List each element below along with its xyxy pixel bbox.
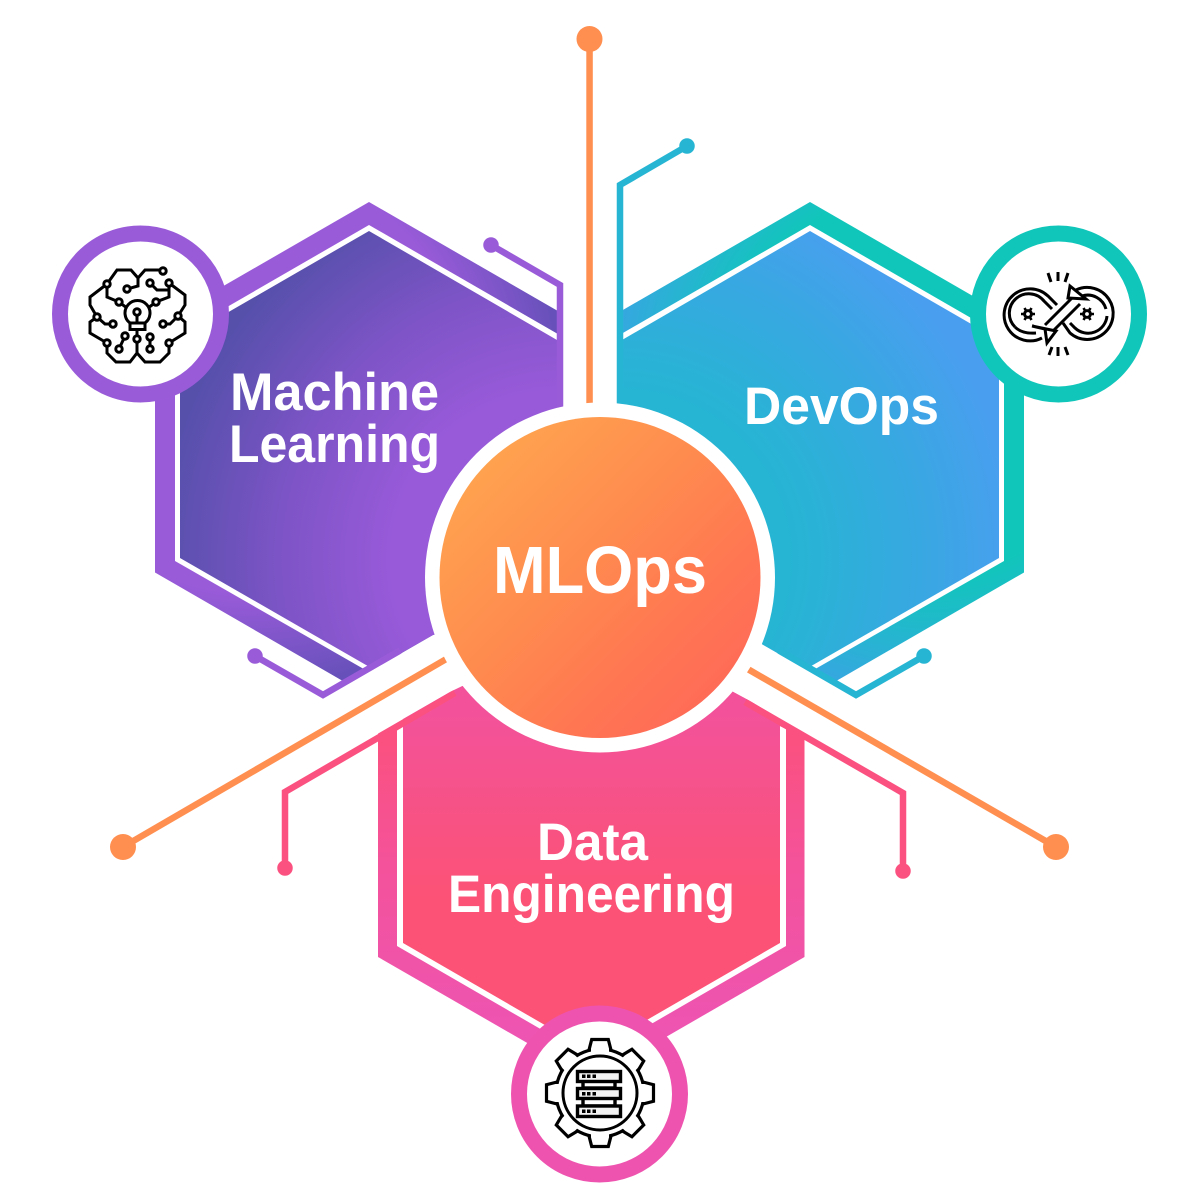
badge: DevOps xyxy=(978,234,1139,394)
hexagon inner white outline: teal xyxy=(622,225,1004,672)
label: Machine Learning: Learning xyxy=(229,415,440,474)
label: Machine Learning xyxy=(229,363,440,474)
icon: gear with server stack xyxy=(546,1040,654,1146)
panel: Machine Learning hexagon xyxy=(155,202,563,695)
hexagon inner white outline: pink xyxy=(397,640,786,1058)
icon: infinity loop with gears and arrows xyxy=(1004,272,1113,356)
panel: Data Engineering hexagon xyxy=(280,620,908,1080)
label: DevOps: DevOps xyxy=(744,377,939,436)
panel: DevOps hexagon xyxy=(617,142,1024,695)
hexagon fill: pink xyxy=(403,620,780,1052)
label: Data Engineering: Data xyxy=(537,813,648,872)
icon: brain circuit with light bulb xyxy=(90,268,185,362)
hexagon inner white outline: purple xyxy=(175,225,557,672)
label: Data Engineering: Engineering xyxy=(448,865,735,924)
badge: Data Engineering xyxy=(519,1014,680,1174)
badge: Machine Learning xyxy=(60,234,221,394)
connector: pink right xyxy=(745,702,908,876)
central circle: MLOps xyxy=(425,402,775,752)
connector: teal lower xyxy=(779,650,928,695)
hexagon fill: purple xyxy=(180,231,563,669)
connector: purple upper xyxy=(486,240,560,410)
orange connector: lower left xyxy=(110,658,448,860)
orange connector: lower right xyxy=(746,668,1069,860)
hexagon frame: purple xyxy=(155,202,563,684)
connector: pink left xyxy=(280,693,455,872)
central circle: MLOps: MLOps xyxy=(493,533,707,608)
hexagon frame: pink xyxy=(378,620,804,1080)
hexagon frame: teal xyxy=(617,202,1024,684)
connector: purple lower xyxy=(250,650,400,695)
connector: teal upper xyxy=(620,142,692,410)
orange connector: top xyxy=(576,26,602,409)
label: Machine Learning: Machine xyxy=(230,363,439,422)
hexagon fill: blue xyxy=(617,231,999,669)
label: Data Engineering xyxy=(448,813,735,924)
